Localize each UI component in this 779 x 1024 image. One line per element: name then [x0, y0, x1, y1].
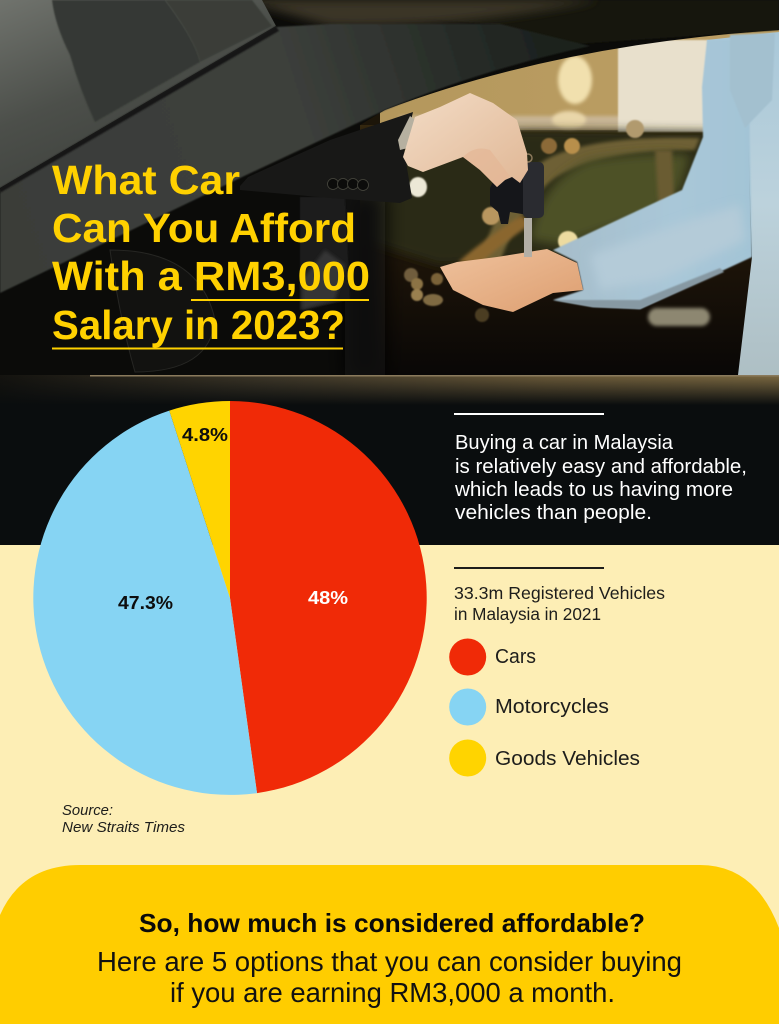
title: Salary in 2023?	[52, 302, 345, 348]
label: 47.3%: 47.3%	[118, 592, 173, 613]
legend heading: 33.3m Registered Vehicles	[454, 583, 665, 603]
upper hand holding keys	[403, 93, 528, 187]
denim shirt	[553, 32, 779, 375]
legend item: cars	[449, 638, 536, 676]
key blade	[524, 218, 532, 257]
lower open hand	[440, 249, 583, 312]
legend heading: in Malaysia in 2021	[454, 604, 601, 624]
window sill	[0, 375, 779, 405]
label: 48%: 48%	[308, 587, 348, 608]
panel text: if you are earning RM3,000 a month.	[170, 977, 615, 1008]
source note: New Straits Times	[62, 819, 185, 836]
legend item: goods vehicles	[449, 740, 640, 776]
jacket buttons	[328, 178, 368, 190]
title	[52, 157, 370, 350]
intro text block: which leads to us having more	[454, 479, 733, 501]
panel text: Here are 5 options that you can consider buying	[97, 946, 682, 977]
shirt torso	[707, 32, 779, 375]
bokeh lights	[404, 120, 644, 322]
slice: goods vehicles 4.8%	[169, 401, 230, 598]
legend item: cars: Cars	[495, 646, 536, 668]
slice: motorcycles 47.3%	[33, 411, 257, 795]
panel heading: So, how much is considered affordable?	[139, 908, 645, 938]
car interior: glass and pillar	[0, 0, 779, 380]
title: Can You Afford	[52, 205, 356, 251]
legend item: goods vehicles: Goods Vehicles	[495, 748, 640, 770]
title: What Car	[52, 157, 240, 203]
title: With a RM3,000	[52, 253, 370, 299]
yellow call-to-action panel	[0, 865, 779, 1024]
photo: handing over car keys	[0, 0, 779, 380]
car key	[490, 154, 544, 257]
legend item: motorcycles	[449, 688, 609, 726]
background scene through the car window	[350, 30, 779, 375]
suit sleeve	[240, 112, 413, 203]
shirt sleeve	[553, 40, 752, 309]
legend	[449, 638, 640, 776]
panel text	[97, 946, 682, 1008]
slice: cars 48%	[230, 401, 427, 793]
intro text block: Buying a car in Malaysia	[455, 432, 674, 454]
intro text block	[454, 413, 747, 524]
watch cuff	[398, 116, 415, 150]
pie chart: registered vehicles	[33, 401, 427, 795]
label: 4.8%: 4.8%	[182, 424, 228, 445]
intro text block: is relatively easy and affordable,	[455, 456, 747, 478]
dark photo panel	[0, 0, 779, 545]
source note	[62, 802, 185, 836]
source note: Source:	[62, 802, 113, 819]
intro text block: vehicles than people.	[455, 502, 652, 524]
legend item: motorcycles: Motorcycles	[495, 696, 609, 718]
legend heading	[454, 567, 665, 624]
